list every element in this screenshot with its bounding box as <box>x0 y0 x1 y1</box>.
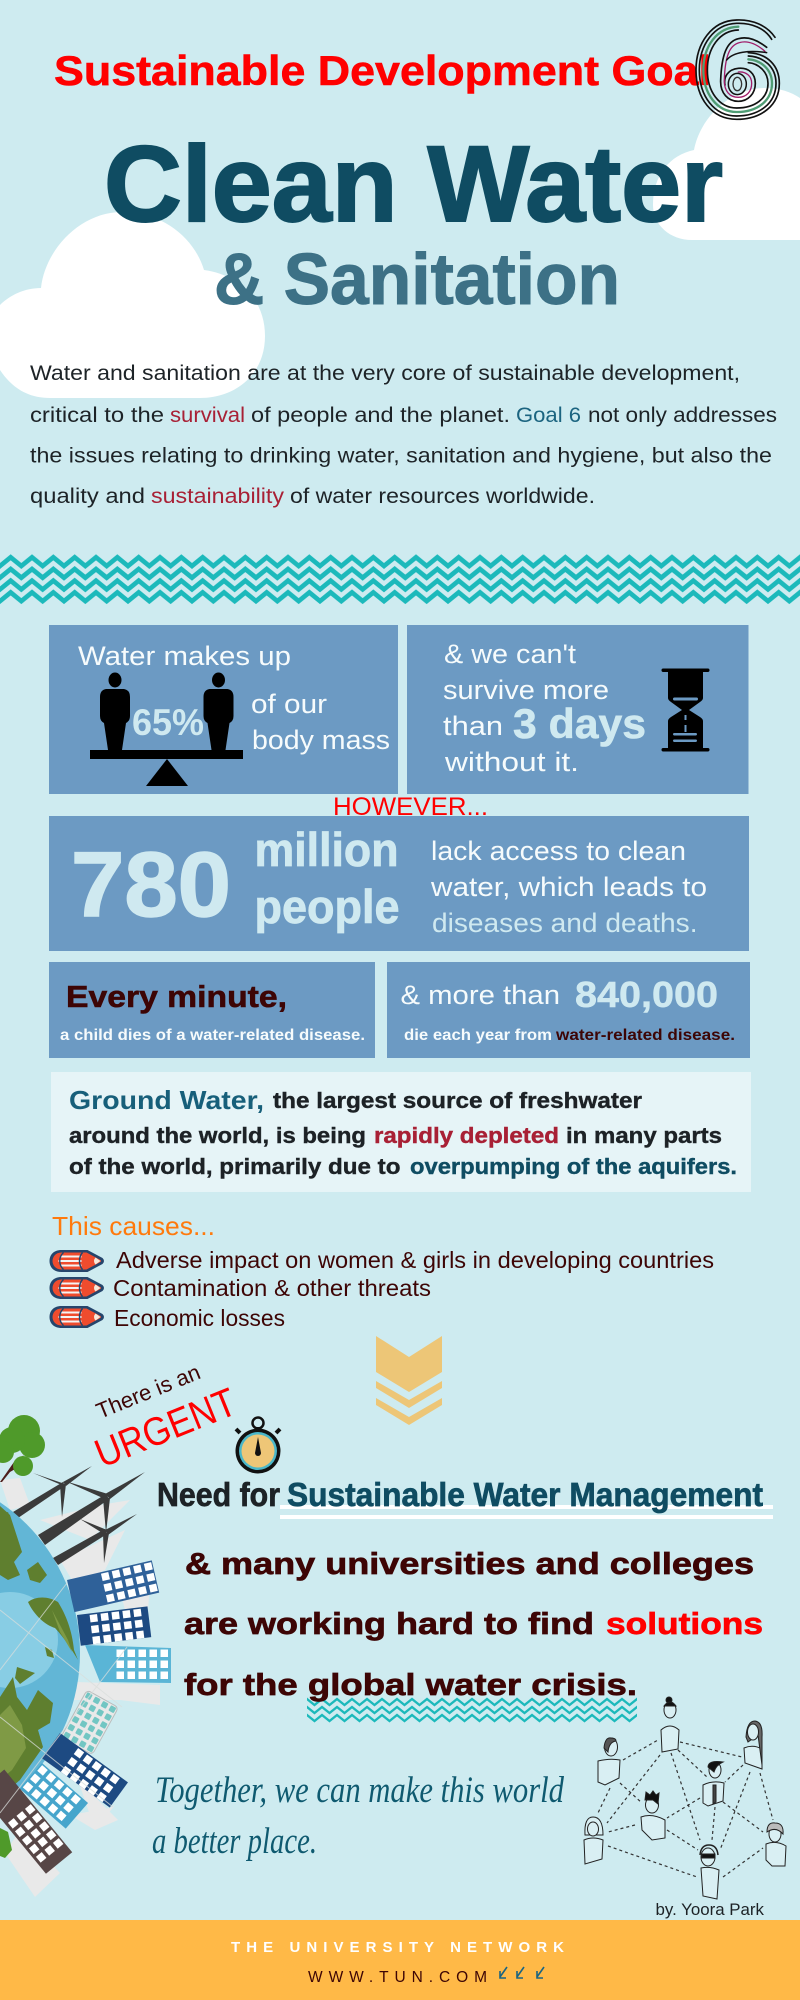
cloud: top right <box>653 88 800 240</box>
intro paragraph: of people and the planet. <box>251 403 510 427</box>
person: left woman <box>584 1817 603 1864</box>
subtitle: & Sanitation: & Sanitation <box>214 240 620 320</box>
heading: Sustainable Development Goal: Sustainable Development Goal <box>54 47 711 94</box>
text: together, a better place <box>152 1770 564 1862</box>
panel: can't survive more than 3 days: without it. <box>444 747 579 777</box>
text: need for sustainable water management: Need for <box>157 1476 280 1513</box>
building 3 <box>85 1645 171 1683</box>
icon: wind turbines <box>13 1466 145 1565</box>
person: man with tie <box>703 1762 724 1806</box>
label: HOWEVER...: HOWEVER... <box>333 793 488 821</box>
panel: ground water: of the world, primarily due to <box>69 1154 400 1179</box>
panel: can't survive more than 3 days: 3 days <box>513 700 646 747</box>
text: together, a better place: a better place. <box>152 1821 317 1862</box>
text: need for sustainable water management: Sustainable Water Management <box>287 1476 763 1513</box>
panel: 780 million people: million <box>254 823 398 876</box>
person: curly hair <box>766 1823 786 1866</box>
icon: small arrows <box>500 1967 544 1978</box>
list: causes: Contamination & other threats <box>113 1275 431 1301</box>
intro paragraph: of water resources worldwide. <box>290 484 595 508</box>
icon: pencil bullet 2 <box>50 1277 104 1299</box>
intro paragraph: quality and <box>30 484 145 508</box>
icon: pencil bullet 1 <box>50 1250 104 1272</box>
icon: downward chevrons <box>376 1336 442 1425</box>
intro paragraph: the issues relating to drinking water, sanitation and hygiene, but also the <box>30 444 772 468</box>
person: spiky hair <box>641 1791 665 1840</box>
panel: ground water: overpumping of the aquifers. <box>410 1154 737 1179</box>
globe <box>0 1471 80 1835</box>
person: sunglasses <box>700 1845 719 1899</box>
continents <box>0 1506 78 1797</box>
panel: ground water: Ground Water, <box>69 1085 264 1115</box>
text: universities and colleges: & many universities and colleges <box>185 1546 754 1581</box>
text: URGENT: URGENT <box>89 1380 243 1476</box>
text: universities and colleges: are working hard to find <box>184 1606 594 1641</box>
list: causes: Adverse impact on women & girls in developing countries <box>116 1247 714 1273</box>
icon: seesaw with two people <box>90 672 243 786</box>
panel: water makes up 65% of body mass: 65% <box>132 702 204 743</box>
text: together, a better place: Together, we can make this world <box>155 1770 564 1811</box>
panel: ground water: rapidly depleted <box>374 1123 559 1148</box>
title: Clean Water: Clean Water <box>104 123 723 244</box>
panel: every minute <box>49 962 375 1058</box>
intro paragraph: Water and sanitation are at the very core of sustainable development, <box>30 361 740 385</box>
text: There is an: There is an <box>93 1359 204 1424</box>
panel: ground water <box>51 1072 751 1192</box>
panel: 780 million people <box>49 816 749 951</box>
panel: ground water: in many parts <box>566 1123 722 1148</box>
panel: can't survive more than 3 days: & we can't <box>444 639 577 669</box>
panel: can't survive more than 3 days: than <box>443 711 503 741</box>
panel: water makes up 65% of body mass <box>49 625 398 794</box>
intro paragraph: survival <box>170 403 245 427</box>
text: universities and colleges <box>184 1546 763 1702</box>
panel: 780 million people: people <box>254 880 400 933</box>
intro paragraph <box>30 361 777 508</box>
credit: by Yoora Park: by. Yoora Park <box>656 1900 764 1919</box>
building 4 <box>61 1690 118 1755</box>
panel: can't survive more than 3 days: survive more <box>443 675 609 705</box>
panel: 780 million people: lack access to clean <box>431 836 686 866</box>
pale shadow shapes <box>0 1478 160 1897</box>
icon: stopwatch <box>236 1418 280 1474</box>
intro paragraph: sustainability <box>151 484 284 508</box>
heading: This causes...: This causes... <box>52 1211 215 1241</box>
intro paragraph: Goal 6 <box>516 403 581 427</box>
list: causes <box>50 1247 714 1331</box>
text: universities and colleges: solutions <box>606 1606 763 1641</box>
illustration: network of people <box>584 1697 786 1899</box>
intro paragraph: not only addresses <box>588 403 777 427</box>
building 1 <box>67 1560 160 1612</box>
illustration: earth with turbines, tree and buildings <box>0 1415 171 1897</box>
list: causes: Economic losses <box>114 1305 285 1331</box>
cloud: left <box>0 212 265 398</box>
icon: hourglass <box>662 668 710 752</box>
panel: more than 840,000: die each year from <box>404 1027 552 1044</box>
building 2 <box>77 1606 151 1648</box>
zigzag divider band <box>0 550 800 606</box>
panel: every minute: a child dies of a water-related disease. <box>60 1027 365 1044</box>
icon: pencil bullet 3 <box>50 1306 104 1328</box>
panel: more than 840,000: & more than <box>400 980 560 1010</box>
person: right woman <box>744 1721 762 1769</box>
panel: 780 million people: 780 <box>71 834 231 936</box>
person: top with hair bun <box>661 1697 679 1752</box>
zigzag underline: global water crisis <box>307 1696 637 1724</box>
panel: water makes up 65% of body mass: Water makes up <box>78 641 291 671</box>
small tree <box>0 1828 12 1858</box>
text: universities and colleges: for the global water crisis. <box>184 1667 637 1702</box>
underline: double white lines <box>280 1505 773 1519</box>
building 5 <box>41 1733 128 1809</box>
panel: 780 million people: diseases and deaths. <box>432 908 698 938</box>
dashed connections <box>597 1740 773 1877</box>
panel: every minute: Every minute, <box>66 979 287 1014</box>
footer bar: WWW.TUN.COM <box>308 1969 487 1986</box>
panel: more than 840,000 <box>387 962 750 1058</box>
panel: more than 840,000: water-related disease. <box>555 1027 735 1044</box>
icon: outlined number 6 <box>696 20 779 119</box>
person: left man <box>598 1738 620 1785</box>
icon: tree <box>0 1415 45 1482</box>
panel: ground water: around the world, is being <box>69 1123 366 1148</box>
globe grid lines <box>0 1583 127 1813</box>
panel: more than 840,000: 840,000 <box>575 974 718 1015</box>
panel: ground water: the largest source of freshwater <box>273 1088 642 1113</box>
footer bar: THE UNIVERSITY NETWORK <box>231 1939 564 1956</box>
panel: water makes up 65% of body mass: body mass <box>252 725 390 755</box>
intro paragraph: critical to the <box>30 403 164 427</box>
footer bar <box>0 1920 800 2000</box>
building 7 <box>0 1770 72 1874</box>
panel: water makes up 65% of body mass: of our <box>251 689 327 719</box>
panel: can't survive more than 3 days <box>407 625 748 794</box>
building 6 <box>20 1763 88 1829</box>
panel: 780 million people: water, which leads to <box>430 872 707 902</box>
